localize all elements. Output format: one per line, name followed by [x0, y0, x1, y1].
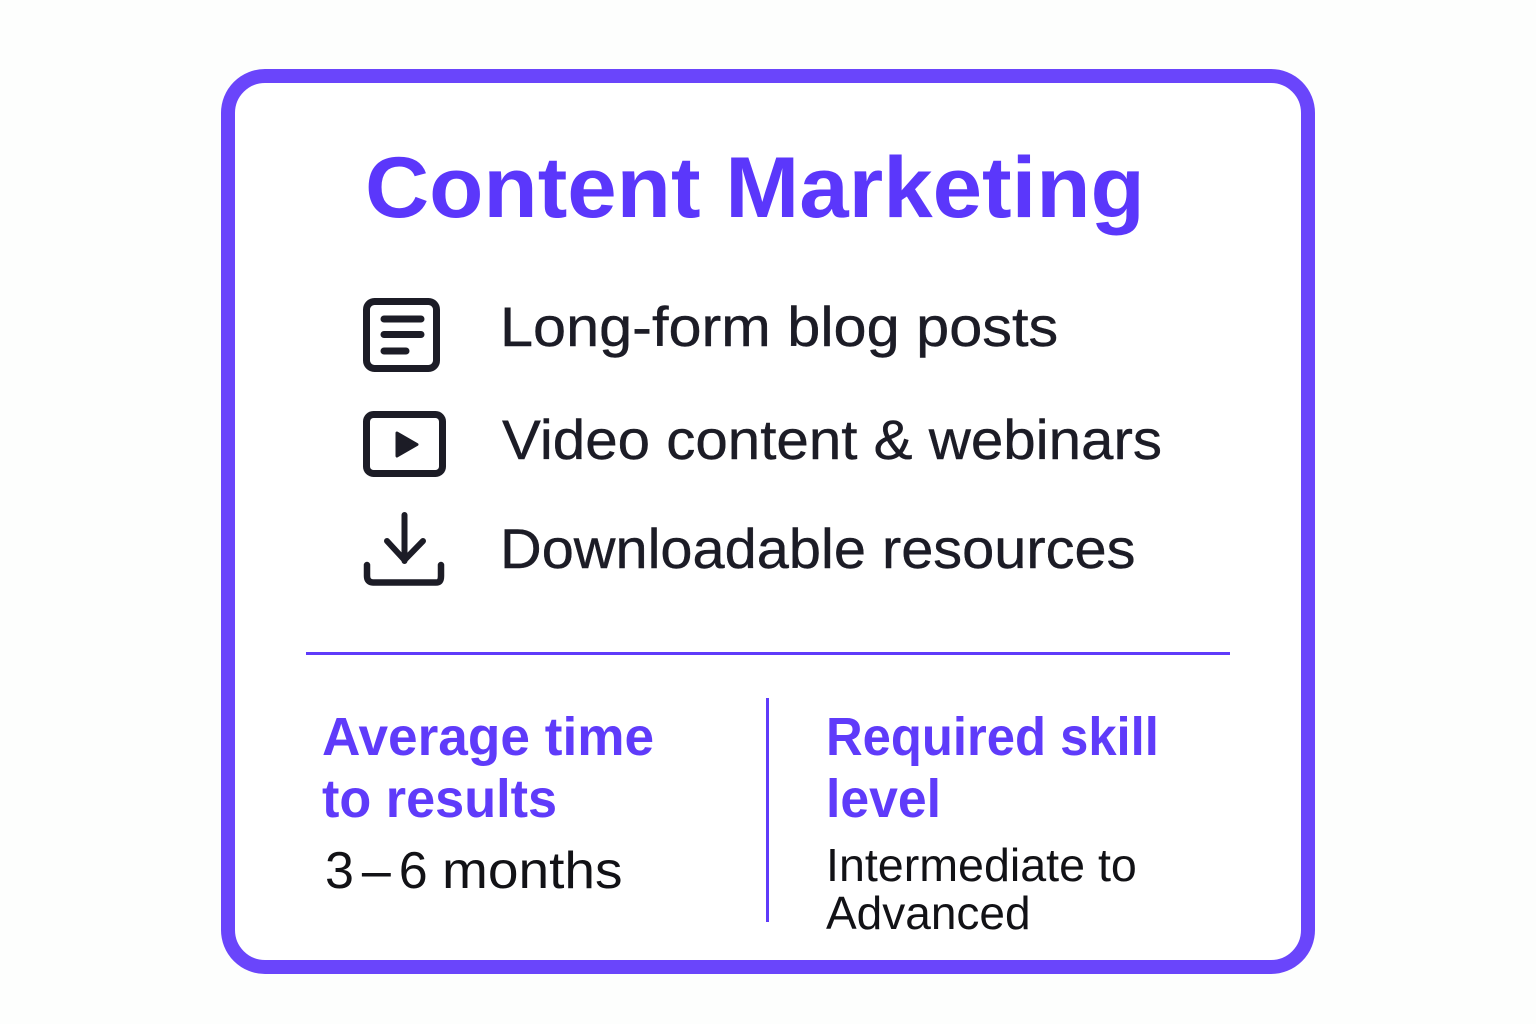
- text: long-form blog posts: Long-form blog posts: [500, 295, 1058, 358]
- icon: document: [363, 298, 440, 372]
- heading: required skill level: level: [826, 769, 941, 829]
- icon: download: [364, 512, 444, 586]
- text: video content and webinars: Video content & webinars: [502, 408, 1162, 471]
- heading: average time to results: Average time: [322, 707, 654, 767]
- text: 3-6 months: [325, 842, 622, 900]
- text: 3-6 months: months: [442, 842, 622, 900]
- text: intermediate to advanced: [826, 839, 1137, 939]
- panel: content marketing card: [221, 69, 1315, 974]
- vertical divider: [766, 698, 769, 922]
- heading: required skill level: [826, 707, 1159, 829]
- heading: required skill level: Required skill: [826, 707, 1159, 767]
- text: intermediate to advanced: Advanced: [826, 887, 1031, 939]
- heading: average time to results: to results: [322, 769, 557, 829]
- heading: average time to results: [322, 707, 654, 829]
- icon: video play: [363, 411, 446, 477]
- text: 3-6 months: 3 – 6: [325, 842, 428, 900]
- text: intermediate to advanced: Intermediate to: [826, 839, 1137, 891]
- text: downloadable resources: Downloadable resources: [500, 517, 1135, 580]
- title: Content Marketing: [365, 140, 1145, 236]
- horizontal divider: [306, 652, 1230, 655]
